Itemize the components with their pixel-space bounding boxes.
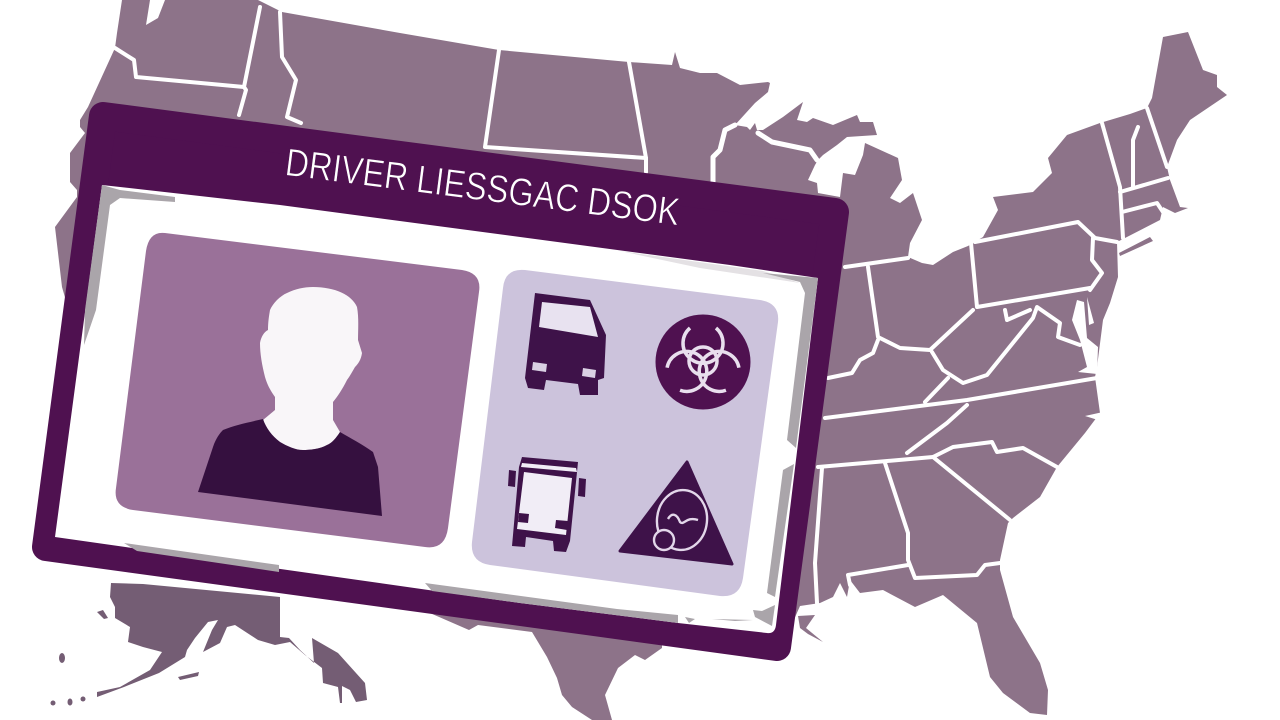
licence card xyxy=(46,116,835,647)
islands: Louisiana delta xyxy=(798,615,823,642)
water: Carolina sounds xyxy=(1085,412,1103,433)
icon: warning triangle xyxy=(620,462,732,564)
map: Alaska xyxy=(50,583,367,706)
card body xyxy=(55,185,818,633)
panel: photo xyxy=(116,233,479,547)
island: Long Island xyxy=(1119,237,1153,256)
panel: hazard endorsements xyxy=(472,270,778,596)
water: Chesapeake Bay xyxy=(1072,297,1098,374)
icon: truck xyxy=(525,293,606,395)
card frame xyxy=(46,116,835,647)
card body shadow slivers xyxy=(84,185,818,626)
state borders xyxy=(115,7,1168,603)
icon: person silhouette xyxy=(198,287,382,516)
card title: DRIVER LIESSGAC DSOK xyxy=(283,141,682,234)
icon: bus xyxy=(508,457,586,552)
water: Puget Sound xyxy=(146,0,165,25)
icon: biohazard xyxy=(656,314,750,410)
